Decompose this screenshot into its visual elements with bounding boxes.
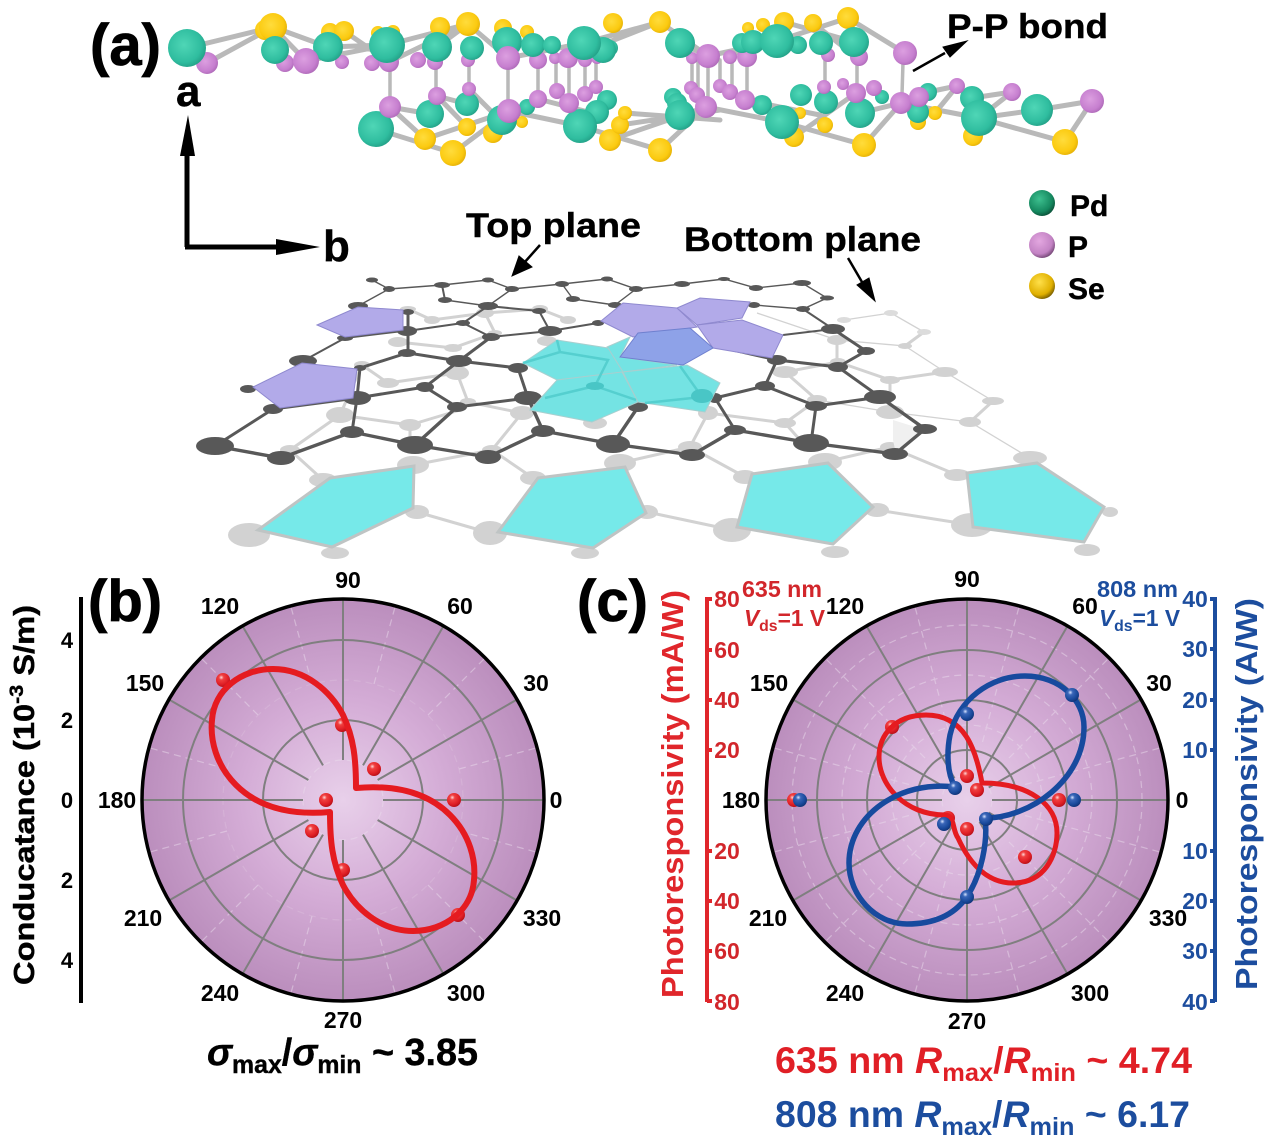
legend: P: P <box>1068 231 1088 264</box>
angle labels b: 150 <box>126 670 164 696</box>
blue axis 808 nm <box>1097 576 1264 1015</box>
axis label b: b <box>323 222 350 271</box>
cyan pentagons: bottom row <box>258 463 1104 548</box>
axis title: -3 <box>7 685 28 704</box>
yellow Se atoms <box>255 7 983 151</box>
ratio 635 nm: min <box>1031 1059 1076 1087</box>
red tick labels: 60 <box>714 938 740 964</box>
axis title: Conducatance (10 <box>9 735 41 985</box>
Vds blue annotation: =1 V <box>1133 605 1181 631</box>
ratio 635 nm: max <box>942 1059 993 1087</box>
polar dashed guides <box>150 607 536 993</box>
angle labels c: 0 <box>1176 787 1188 813</box>
arrow: P-P bond <box>913 41 967 71</box>
fit curve b <box>212 669 474 931</box>
Vds red annotation: ds <box>759 618 778 635</box>
axis tick labels: 2 <box>61 868 73 893</box>
red fit curve <box>879 715 1057 883</box>
polar outer ring <box>766 599 1168 1001</box>
blue axis title: Photoresponsivity (A/W) <box>1229 598 1264 990</box>
axis label a: a <box>176 67 201 116</box>
blue tick labels: 10 <box>1182 737 1208 763</box>
635 nm annotation: 635 nm <box>742 576 822 602</box>
angle labels b: 0 <box>550 787 562 813</box>
P-P bond label: P-P bond <box>947 8 1108 46</box>
axis a arrow <box>180 115 195 247</box>
purple pentagons <box>253 298 783 408</box>
red tick labels <box>714 586 740 1015</box>
axis tick labels: 4 <box>61 948 74 973</box>
angle labels c: 330 <box>1149 905 1187 931</box>
ratio 635 nm: 635 nm R <box>775 1040 942 1081</box>
red tick labels: 20 <box>714 737 740 763</box>
red points <box>787 720 1066 864</box>
red axis title: Photoresponsivity (mA/W) <box>655 590 690 998</box>
Bottom plane label: Bottom plane <box>684 221 921 259</box>
angle labels b: 60 <box>447 593 473 619</box>
ratio b: max <box>232 1051 282 1079</box>
ratio 635 nm: R <box>1004 1040 1031 1081</box>
red axis line <box>707 597 712 1002</box>
ratio 808 nm: ~ 6.17 <box>1074 1094 1190 1135</box>
arrow: bottom plane <box>848 258 875 301</box>
front purple P and yellow Se atoms <box>293 41 1104 166</box>
angle labels b: 180 <box>98 787 136 813</box>
polar dashed guides <box>774 607 1160 993</box>
axis tick labels: 4 <box>61 628 74 653</box>
polar plot b <box>98 567 562 1033</box>
legend: Se: Se <box>1068 273 1105 306</box>
angle labels b: 120 <box>201 593 239 619</box>
ratio 808 nm: min <box>1030 1113 1074 1141</box>
ratio 635 nm: / <box>993 1040 1004 1081</box>
blue tick labels: 40 <box>1182 586 1208 612</box>
blue tick labels <box>1182 586 1208 1015</box>
axis line <box>79 597 83 1003</box>
panel c label: (c) <box>577 569 648 634</box>
ratio b: / <box>282 1032 293 1074</box>
ratio b: ~ 3.85 <box>361 1032 478 1074</box>
angle labels c: 180 <box>722 787 760 813</box>
angle labels b: 330 <box>523 905 561 931</box>
ratio 808 nm: / <box>992 1094 1002 1135</box>
teal Pd atoms <box>168 24 1053 147</box>
bonds <box>187 18 1092 153</box>
angle labels b: 300 <box>447 980 485 1006</box>
polar background <box>766 599 1168 1001</box>
Vds red annotation: =1 V <box>778 605 826 631</box>
bottom plane lattice (grey) <box>228 305 1118 559</box>
blue points <box>793 688 1081 904</box>
angle labels c: 90 <box>954 566 980 592</box>
Vds blue annotation: V <box>1099 605 1116 631</box>
data points b <box>216 673 465 922</box>
angle labels b: 210 <box>124 905 162 931</box>
red tick labels: 40 <box>714 888 740 914</box>
angle labels b: 240 <box>201 980 239 1006</box>
red tick labels: 20 <box>714 838 740 864</box>
blue axis line <box>1210 597 1215 1002</box>
red tick labels: 40 <box>714 687 740 713</box>
panel b label: (b) <box>88 569 162 634</box>
polar plot c <box>722 566 1188 1034</box>
polar grid <box>766 599 1168 1001</box>
axis title: S/m) <box>9 605 41 685</box>
Top plane label: Top plane <box>466 207 641 245</box>
angle labels b <box>98 567 562 1033</box>
polar grid <box>142 599 544 1001</box>
red tick labels: 80 <box>714 989 740 1015</box>
Vds blue annotation: ds <box>1114 618 1133 635</box>
ratio 808 nm: max <box>941 1113 992 1141</box>
blue tick labels: 10 <box>1182 838 1208 864</box>
small purple P atoms <box>196 47 868 74</box>
blue fit curve <box>849 676 1084 924</box>
angle labels c <box>722 566 1188 1034</box>
blue tick labels: 30 <box>1182 636 1208 662</box>
top plane lattice (dark) <box>196 276 937 465</box>
angle labels c: 300 <box>1071 980 1109 1006</box>
angle labels c: 210 <box>749 905 787 931</box>
polar outer ring <box>142 599 544 1001</box>
panel a label: (a) <box>90 13 161 78</box>
808 nm annotation: 808 nm <box>1097 576 1178 602</box>
Vds red annotation: V <box>744 605 761 631</box>
red tick labels: 60 <box>714 637 740 663</box>
legend <box>1029 190 1108 306</box>
legend: Pd: Pd <box>1070 190 1108 223</box>
axis tick labels: 0 <box>61 788 73 813</box>
axis b arrow <box>185 239 320 255</box>
polar background <box>142 599 544 1001</box>
angle labels b: 270 <box>324 1007 362 1033</box>
axes a and b <box>176 67 350 271</box>
conductance axis <box>7 597 81 1003</box>
blue pentagon <box>620 328 713 365</box>
blue tick labels: 20 <box>1182 888 1208 914</box>
blue tick labels: 30 <box>1182 938 1208 964</box>
cyan pentagons: center cluster <box>523 337 720 422</box>
ratio b: σ <box>207 1032 234 1074</box>
angle labels c: 150 <box>750 670 788 696</box>
angle labels c: 120 <box>826 593 864 619</box>
ratio b: min <box>317 1051 361 1079</box>
ratio 808 nm: 808 nm R <box>775 1094 941 1135</box>
ratio 808 nm: R <box>1002 1094 1030 1135</box>
angle labels c: 270 <box>948 1008 986 1034</box>
red axis 635 nm <box>655 576 826 1015</box>
ratio 635 nm: ~ 4.74 <box>1076 1040 1192 1081</box>
crystal structure side view <box>168 7 1104 166</box>
axis tick labels <box>61 628 74 973</box>
angle labels c: 30 <box>1146 670 1172 696</box>
angle labels c: 240 <box>826 980 864 1006</box>
blue tick labels: 40 <box>1182 989 1208 1015</box>
angle labels c: 60 <box>1072 593 1098 619</box>
arrow: top plane <box>512 245 540 276</box>
angle labels b: 90 <box>335 567 361 593</box>
ratio b: σ <box>292 1032 319 1074</box>
blue tick labels: 20 <box>1182 687 1208 713</box>
angle labels b: 30 <box>523 670 549 696</box>
red tick labels: 80 <box>714 586 740 612</box>
axis tick labels: 2 <box>61 708 73 733</box>
lattice perspective view <box>196 276 1118 559</box>
